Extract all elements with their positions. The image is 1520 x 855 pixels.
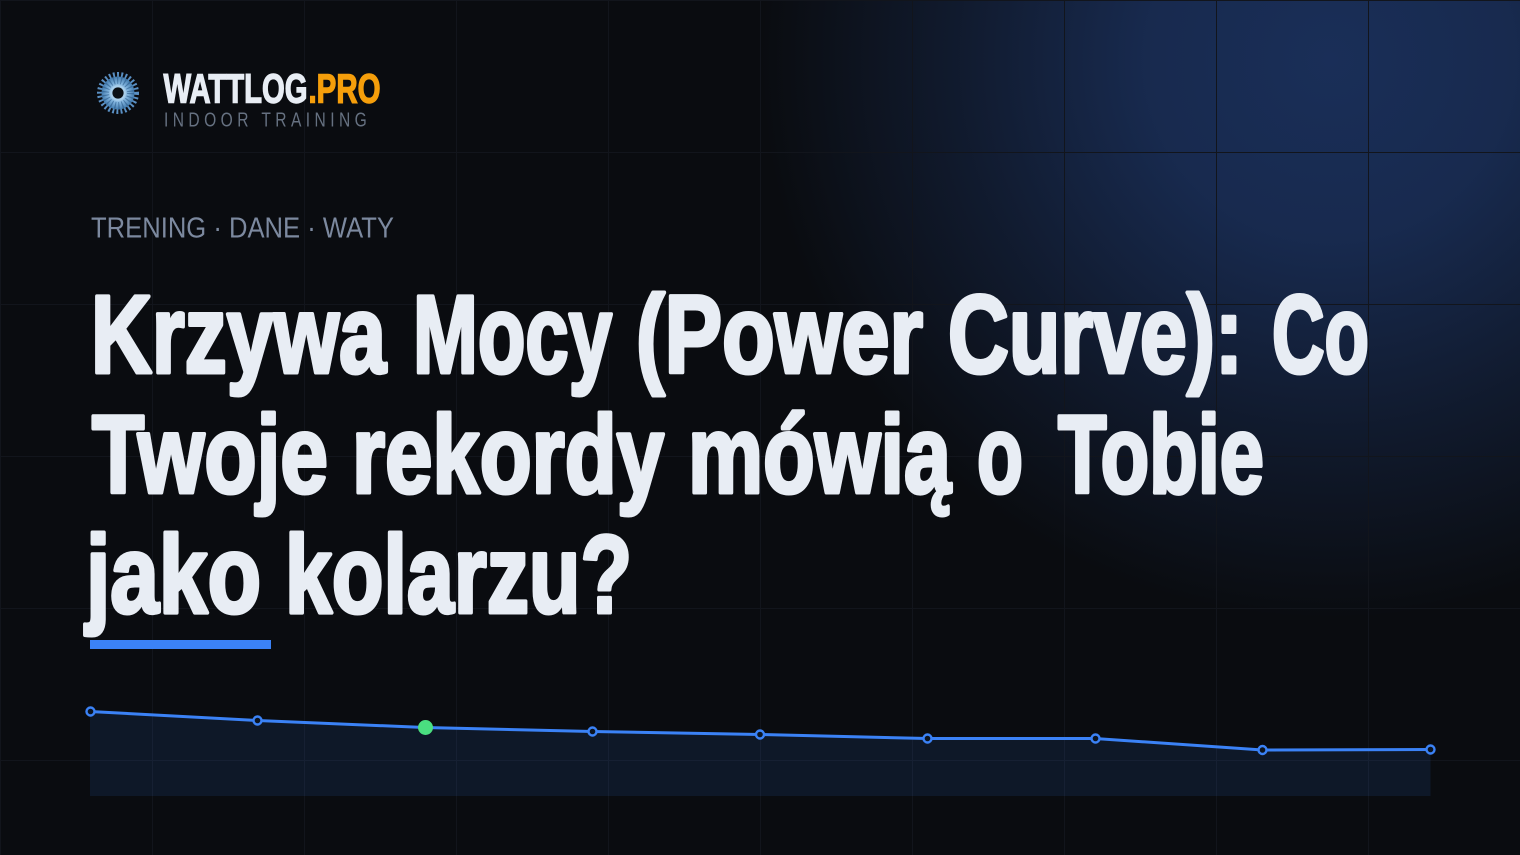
title: jako xyxy=(84,514,261,636)
title: Co xyxy=(1272,274,1369,396)
chart area fill xyxy=(90,712,1430,796)
logo: gear cassette icon xyxy=(100,74,136,112)
title: Tobie xyxy=(1058,394,1264,516)
title: rekordy xyxy=(352,394,664,516)
chart line xyxy=(90,712,1430,750)
title: Mocy xyxy=(413,274,612,396)
power curve chart xyxy=(86,708,1434,796)
title: kolarzu? xyxy=(285,514,632,636)
logo tagline: INDOOR TRAINING xyxy=(164,109,367,131)
logo wordmark: .PRO xyxy=(308,66,380,112)
highlighted point xyxy=(418,720,433,735)
title xyxy=(84,274,1369,636)
logo wordmark: WATTLOG xyxy=(164,66,308,112)
title: o xyxy=(977,394,1023,516)
title: (Power xyxy=(636,274,923,396)
title: Twoje xyxy=(92,394,328,516)
title: mówią xyxy=(688,394,952,516)
chart points xyxy=(86,708,1434,754)
title: Curve): xyxy=(948,274,1243,396)
title: Krzywa xyxy=(91,274,387,396)
title underline xyxy=(90,640,271,649)
eyebrow text: TRENING · DANE · WATY xyxy=(91,212,394,244)
